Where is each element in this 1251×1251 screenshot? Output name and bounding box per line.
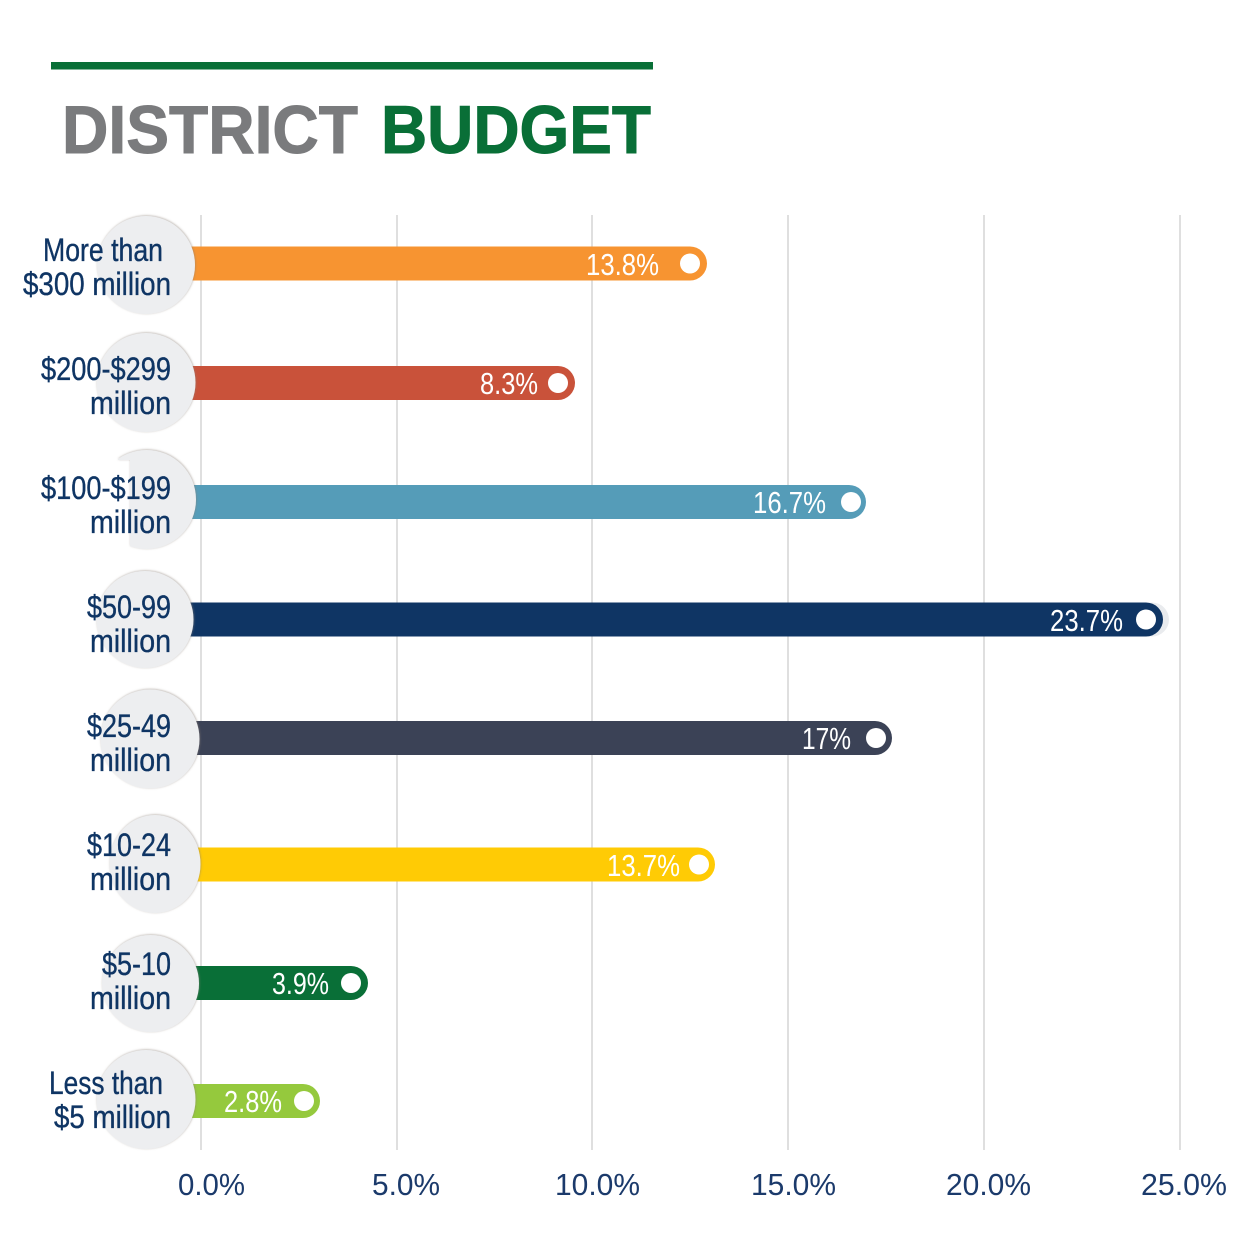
category labels: $5-10 <box>102 946 171 982</box>
category labels: million <box>90 623 171 659</box>
category labels: million <box>90 980 171 1016</box>
bar: $25-49 million <box>185 721 892 756</box>
category labels: million <box>90 861 171 897</box>
x axis labels: 25.0% <box>1141 1167 1227 1202</box>
bar: more than $300 million: 13.8% <box>586 247 659 282</box>
category labels <box>23 232 171 1135</box>
category labels: million <box>90 504 171 540</box>
bar: less than $5 million <box>180 1084 320 1119</box>
bar: $5-10 million <box>185 966 368 1001</box>
bar: $5-10 million: 3.9% <box>272 966 329 1001</box>
category labels: More than <box>43 232 163 268</box>
title rule <box>51 62 653 70</box>
category labels: $50-99 <box>87 589 171 625</box>
x axis labels: 20.0% <box>946 1167 1031 1202</box>
x axis labels <box>178 1167 1227 1202</box>
bar: $200-$299 million: 8.3% <box>480 366 538 401</box>
category labels: $25-49 <box>87 708 171 744</box>
bar: more than $300 million <box>180 246 707 282</box>
bar: $200-$299 million <box>180 366 575 401</box>
category labels: $10-24 <box>87 827 171 863</box>
bar: $10-24 million <box>185 848 715 883</box>
title: DISTRICT <box>62 92 358 168</box>
bar: $25-49 million: 17% <box>802 721 851 756</box>
category labels: million <box>90 742 171 778</box>
title: BUDGET <box>381 92 651 168</box>
x axis labels: 10.0% <box>555 1167 640 1202</box>
x axis labels: 5.0% <box>372 1167 440 1202</box>
x axis labels: 15.0% <box>751 1167 836 1202</box>
category labels: million <box>90 385 171 421</box>
title <box>62 92 651 168</box>
category labels: $100-$199 <box>41 470 171 506</box>
bar: $100-$199 million <box>180 485 866 520</box>
category labels: $300 million <box>23 266 171 302</box>
grid lines <box>200 215 1181 1150</box>
label badges <box>96 216 200 1149</box>
bar: $50-99 million <box>180 602 1169 638</box>
bar: $50-99 million: 23.7% <box>1050 603 1123 638</box>
bar: $100-$199 million: 16.7% <box>753 485 826 520</box>
category labels: $200-$299 <box>41 351 171 387</box>
bar: less than $5 million: 2.8% <box>224 1084 282 1119</box>
category labels: $5 million <box>54 1099 171 1135</box>
category labels: Less than <box>49 1065 163 1101</box>
bar: $10-24 million: 13.7% <box>607 848 680 883</box>
x axis labels: 0.0% <box>178 1167 245 1202</box>
